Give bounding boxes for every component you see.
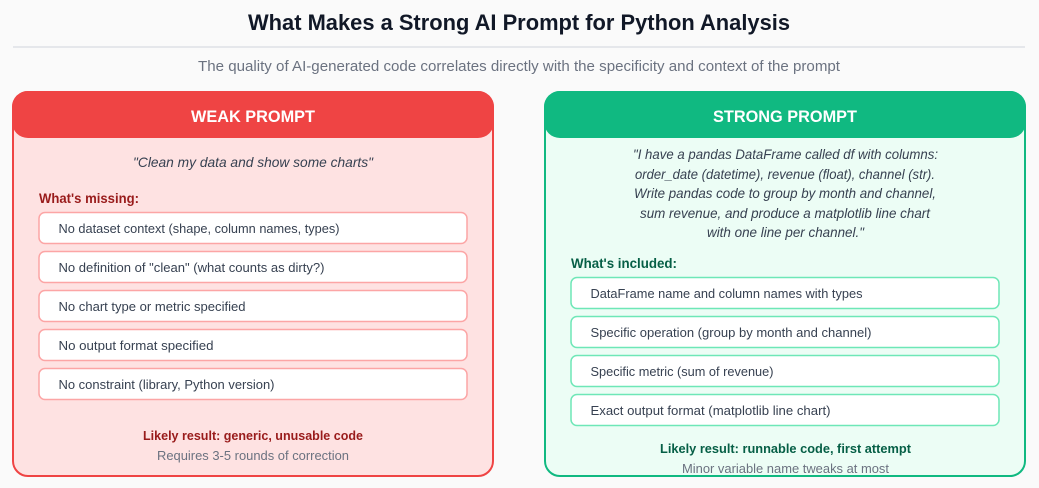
missing item: clean definition: No definition of "clean" (what counts as dirty?) [58, 260, 324, 275]
panel: strong prompt [544, 91, 1026, 476]
included item: dataframe: DataFrame name and column names with types [590, 286, 863, 301]
missing item: output format: No output format specified [58, 338, 214, 353]
included item: dataframe [571, 278, 999, 308]
subtitle: The quality of AI-generated code correlates directly with the specificity and context of the prompt [198, 58, 841, 75]
weak prompt quote: "Clean my data and show some charts" [133, 154, 374, 170]
missing item: constraint: No constraint (library, Python version) [58, 377, 274, 392]
title: What Makes a Strong AI Prompt for Python Analysis [248, 10, 790, 35]
missing item: chart type [39, 290, 467, 322]
panel: weak prompt [12, 91, 494, 476]
missing item: chart type: No chart type or metric specified [58, 299, 246, 314]
strong prompt quote: sum revenue, and produce a matplotlib line chart [640, 205, 931, 221]
missing item: dataset context: No dataset context (shape, column names, types) [58, 221, 340, 236]
strong prompt quote: Write pandas code to group by month and channel, [634, 185, 936, 201]
weak prompt header [12, 91, 494, 138]
strong prompt quote [633, 146, 938, 240]
included item: operation [571, 316, 999, 348]
strong prompt quote: "I have a pandas DataFrame called df with columns: [633, 146, 938, 162]
included item: metric: Specific metric (sum of revenue) [590, 364, 774, 379]
strong prompt header [544, 91, 1026, 138]
weak prompt header: WEAK PROMPT [191, 107, 316, 126]
weak likely result: Likely result: generic, unusable code [143, 428, 363, 443]
what's missing heading: What's missing: [39, 190, 139, 206]
missing item: dataset context [39, 212, 467, 244]
strong prompt header: STRONG PROMPT [713, 107, 858, 126]
missing item: constraint [39, 368, 467, 400]
missing item: output format [39, 330, 467, 360]
strong likely result: Likely result: runnable code, first attempt [660, 441, 912, 456]
missing item: clean definition [39, 252, 467, 282]
included item: output format [571, 394, 999, 426]
what's included heading: What's included: [571, 255, 677, 271]
included item: metric [571, 356, 999, 386]
strong result note: Minor variable name tweaks at most [682, 461, 889, 476]
strong prompt quote: order_date (datetime), revenue (float), channel (str). [635, 166, 935, 182]
strong prompt quote: with one line per channel." [707, 224, 865, 240]
included item: operation: Specific operation (group by month and channel) [590, 325, 872, 340]
included item: output format: Exact output format (matplotlib line chart) [590, 403, 830, 418]
weak result note: Requires 3-5 rounds of correction [157, 448, 349, 463]
